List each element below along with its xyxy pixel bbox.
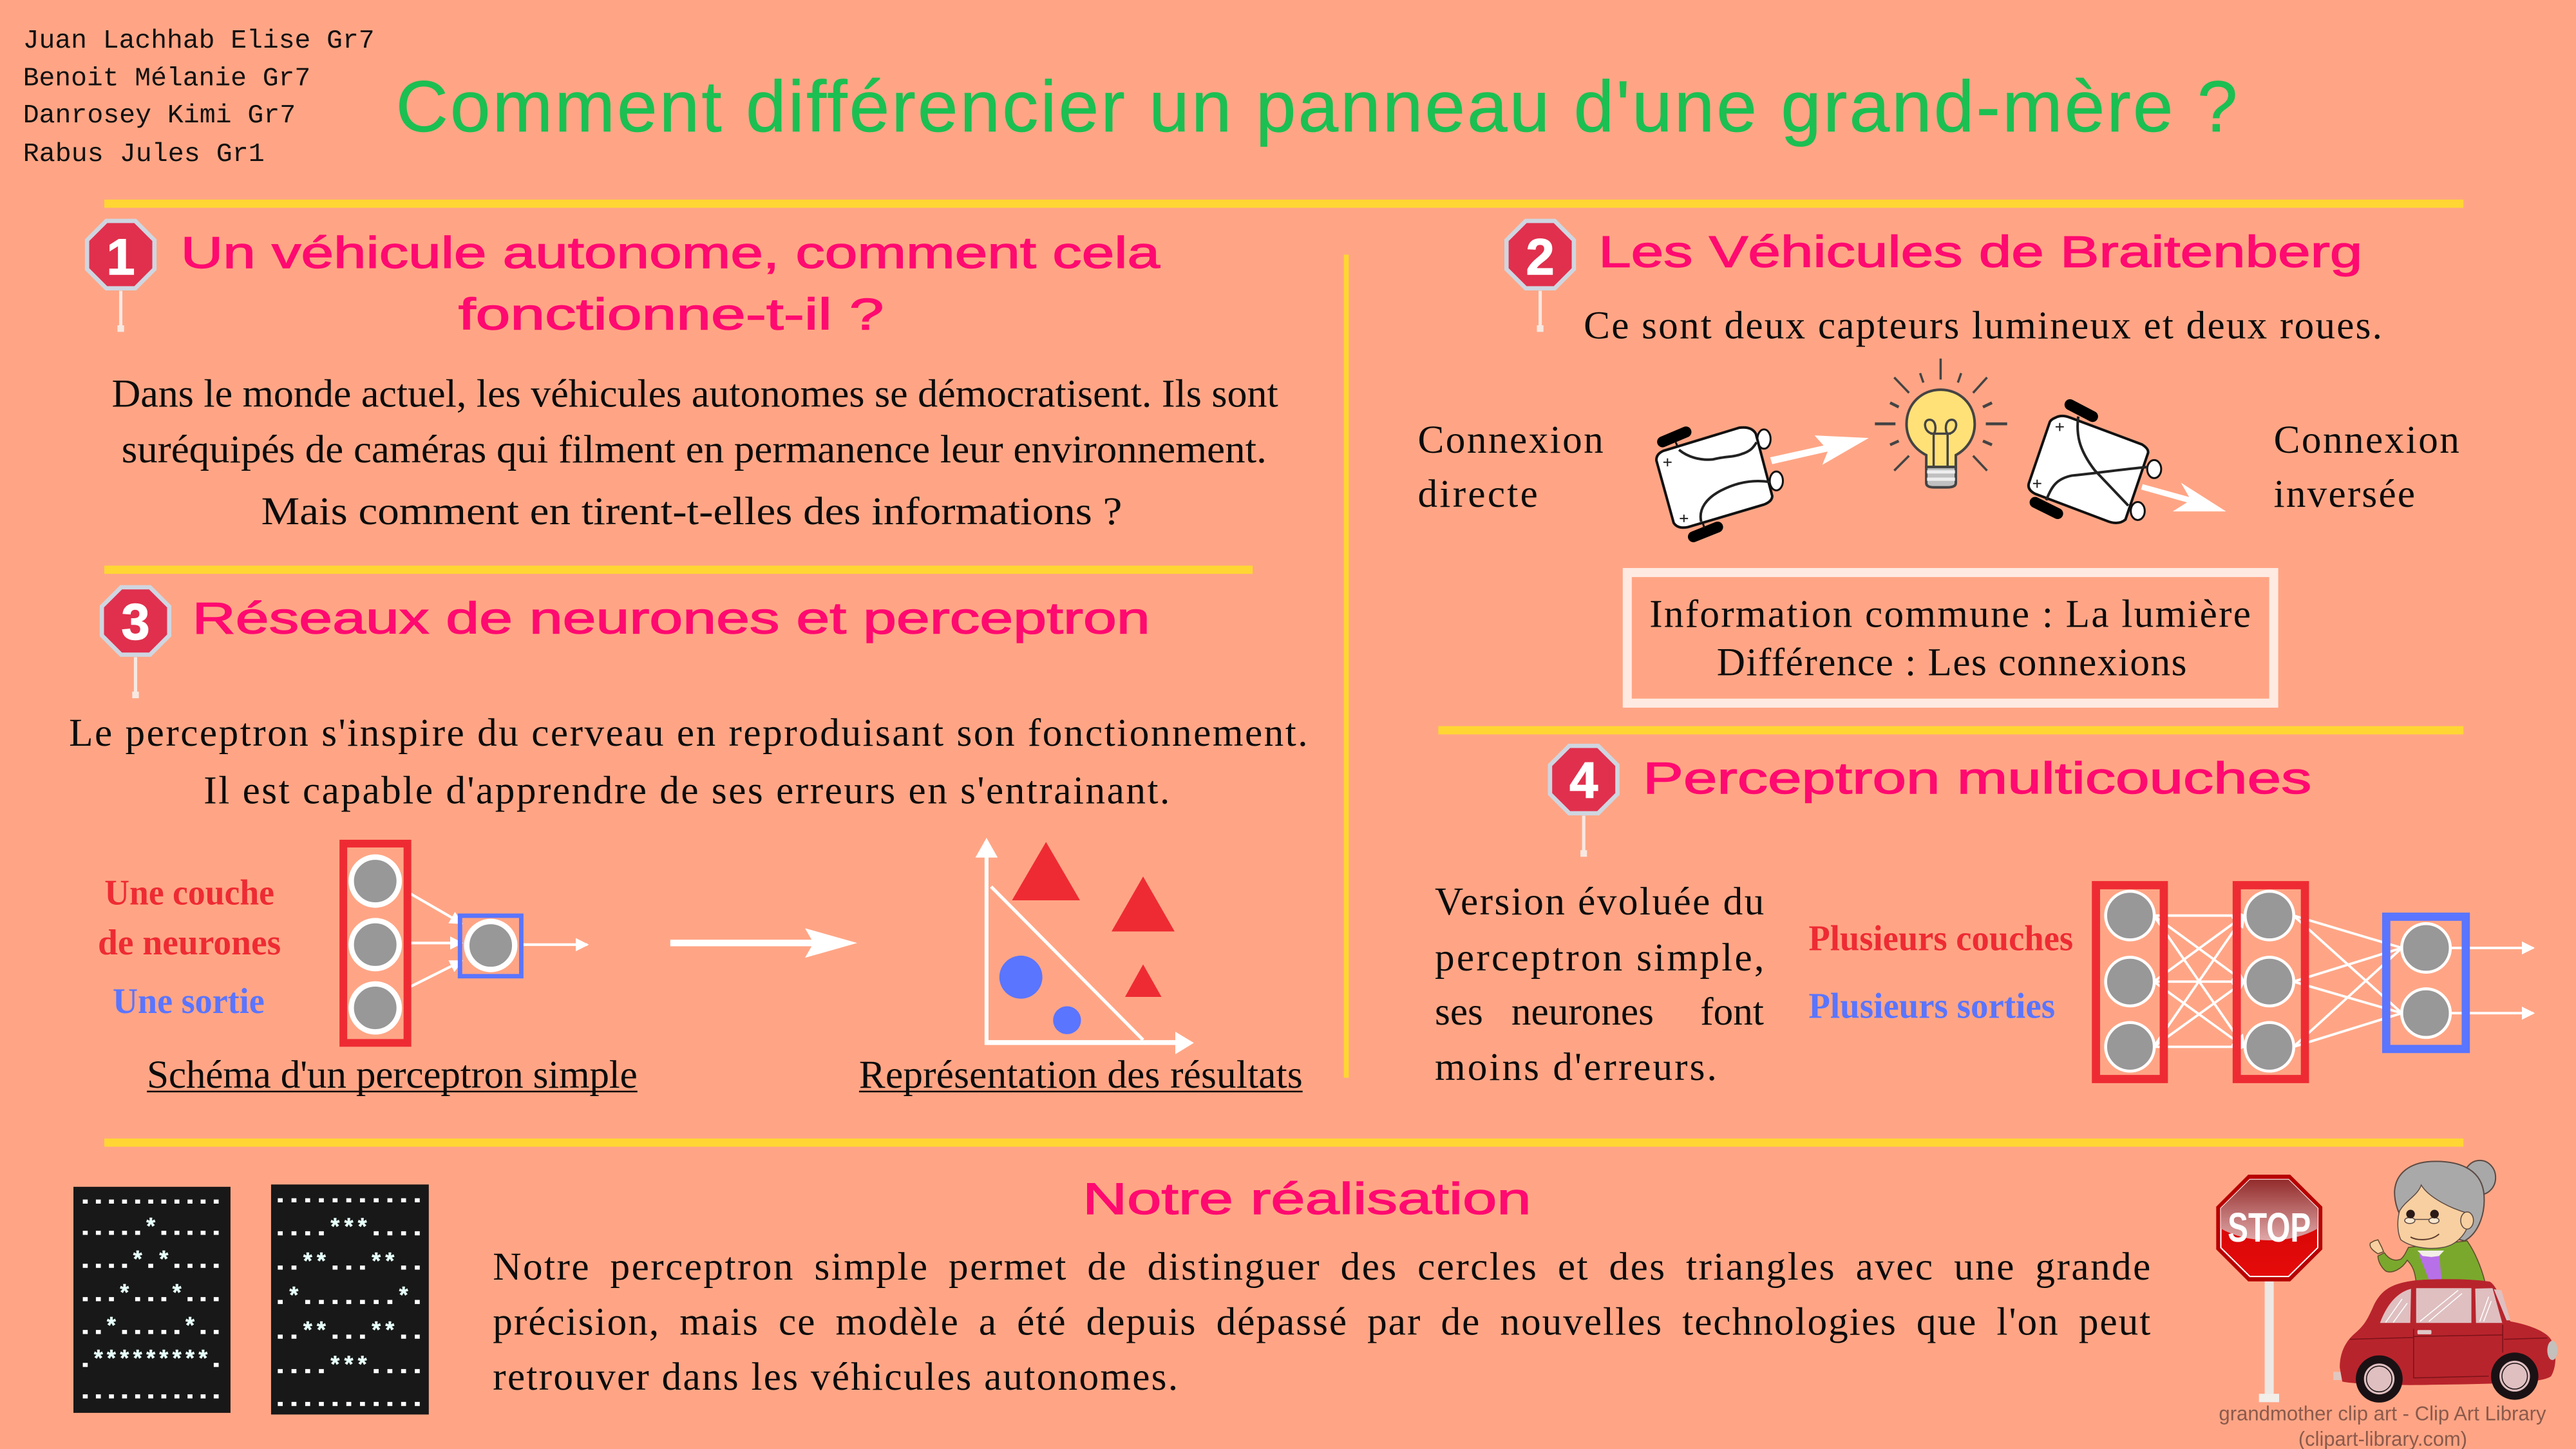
- text: intro: Ce sont deux capteurs lumineux et deux roues.: [1584, 304, 2382, 348]
- panel: realisation: [73, 1158, 2557, 1449]
- labels: multilayer: Plusieurs sorties: [1808, 986, 2055, 1026]
- red car: [2333, 1279, 2557, 1403]
- authors: Benoit Mélanie Gr7: [23, 64, 310, 94]
- diagram: simple perceptron: [343, 844, 587, 1043]
- terminal: triangle: *: [144, 1215, 158, 1242]
- text block 1: Mais comment en tirent-t-elles des informations ?: [261, 489, 1122, 533]
- authors: [23, 26, 375, 169]
- panel: section 4: [1435, 746, 2533, 1089]
- panel: section 1: [87, 221, 1278, 533]
- text block 4: perceptron simple,: [1435, 936, 1764, 980]
- icon: light bulb: [1875, 359, 2007, 488]
- icon: sign 2: 2: [1526, 228, 1555, 285]
- icon: sign 2: [1506, 221, 1574, 332]
- text block 4: Version évoluée du: [1435, 880, 1764, 923]
- text block 3: Le perceptron s'inspire du cerveau en reproduisant son fonctionnement.: [69, 711, 1308, 755]
- text block: realisation: précision, mais ce modèle a été depuis dépassé par de nouvelles technologies que l'on peut: [493, 1300, 2150, 1344]
- heading 3: Réseaux de neurones et perceptron: [192, 593, 1150, 643]
- caption: results: Représentation des résultats: [859, 1053, 1303, 1097]
- text block 1: [111, 372, 1278, 533]
- callout: common information: [1627, 573, 2274, 703]
- right vehicle: [2029, 404, 2161, 523]
- heading 1: Un véhicule autonome, comment cela: [181, 228, 1160, 278]
- authors: Juan Lachhab Elise Gr7: [23, 26, 375, 56]
- authors: Rabus Jules Gr1: [23, 140, 265, 169]
- label: connexion inversee: [2274, 418, 2459, 516]
- arrow: to results: [670, 928, 857, 958]
- labels: simple perceptron: de neurones: [98, 923, 281, 963]
- text block 1: suréquipés de caméras qui filment en permanence leur environnement.: [122, 428, 1267, 471]
- panel: section 2: [1418, 221, 2459, 703]
- grandmother: [2370, 1160, 2496, 1282]
- labels: multilayer: [1808, 919, 2073, 1026]
- image credit: [2219, 1401, 2546, 1449]
- text block 4: neurones: [1511, 990, 1654, 1034]
- text block 1: Dans le monde actuel, les véhicules autonomes se démocratisent. Ils sont: [111, 372, 1278, 415]
- chart: results: [976, 838, 1194, 1054]
- icon: sign 3: [102, 587, 169, 698]
- text block 4: ses: [1435, 990, 1483, 1034]
- text block 4: font: [1700, 990, 1764, 1034]
- icon: stop sign: [2216, 1175, 2322, 1403]
- terminal: circle: ****: [301, 1319, 397, 1345]
- diagram: multilayer perceptron: [2096, 885, 2533, 1079]
- icon: stop sign: STOP: [2228, 1204, 2311, 1251]
- terminal: circle: ****: [301, 1250, 397, 1276]
- labels: simple perceptron: Une couche: [104, 873, 274, 913]
- label: connexion directe: [1418, 418, 1604, 516]
- text block: realisation: Notre perceptron simple permet de distinguer des cercles et des triangles avec une grande: [493, 1245, 2150, 1289]
- terminal: triangle: **: [131, 1248, 171, 1274]
- heading: realisation: Notre réalisation: [1083, 1174, 1531, 1224]
- icon: sign 1: [87, 221, 155, 332]
- heading 2: Les Véhicules de Braitenberg: [1598, 227, 2362, 277]
- heading 1: fonctionne-t-il ?: [459, 289, 884, 339]
- labels: simple perceptron: [98, 873, 281, 1021]
- callout: common information: Information commune : La lumière: [1649, 592, 2251, 636]
- terminal: circle: ***: [328, 1354, 369, 1380]
- terminal: triangle: **: [104, 1314, 197, 1341]
- left vehicle: [1656, 428, 1783, 536]
- caption: schema: Schéma d'un perceptron simple: [147, 1053, 638, 1097]
- text block: realisation: [493, 1245, 2150, 1399]
- terminal: circle: [271, 1184, 429, 1414]
- terminal: circle: **: [287, 1284, 411, 1311]
- label: connexion inversee: inversée: [2274, 472, 2415, 516]
- terminal: circle: ***: [328, 1216, 369, 1242]
- labels: simple perceptron: Une sortie: [113, 981, 265, 1021]
- panel: section 3: [69, 587, 1308, 1097]
- labels: multilayer: Plusieurs couches: [1808, 919, 2073, 959]
- icon: grandmother in car: [2333, 1160, 2557, 1403]
- text block: realisation: retrouver dans les véhicules autonomes.: [493, 1355, 1178, 1399]
- authors: Danrosey Kimi Gr7: [23, 101, 296, 131]
- diagram: vehicles and bulb: [1656, 359, 2226, 536]
- label: connexion directe: directe: [1418, 472, 1538, 516]
- callout: common information: Différence : Les connexions: [1717, 640, 2186, 684]
- image credit: grandmother clip art - Clip Art Library: [2219, 1401, 2546, 1425]
- icon: sign 4: [1550, 746, 1617, 857]
- arrow: away from light: [2141, 482, 2226, 511]
- terminal: triangle: **: [118, 1282, 184, 1308]
- icon: sign 3: 3: [121, 592, 149, 650]
- label: connexion directe: Connexion: [1418, 418, 1604, 462]
- title: Comment différencier un panneau d'une grand-mère ?: [396, 66, 2237, 147]
- text block 3: [69, 711, 1308, 812]
- text block 4: [1435, 880, 1764, 1089]
- text block 3: Il est capable d'apprendre de ses erreurs en s'entrainant.: [204, 768, 1170, 812]
- label: connexion inversee: Connexion: [2274, 418, 2459, 462]
- heading 1: [181, 228, 1160, 339]
- arrow: towards light: [1770, 435, 1869, 465]
- icon: sign 1: 1: [107, 228, 135, 285]
- text block 4: moins d'erreurs.: [1435, 1045, 1717, 1089]
- icon: sign 4: 4: [1569, 752, 1598, 809]
- terminal: triangle: [73, 1187, 231, 1413]
- terminal: triangle: *********: [91, 1347, 210, 1374]
- heading 4: Perceptron multicouches: [1643, 753, 2311, 803]
